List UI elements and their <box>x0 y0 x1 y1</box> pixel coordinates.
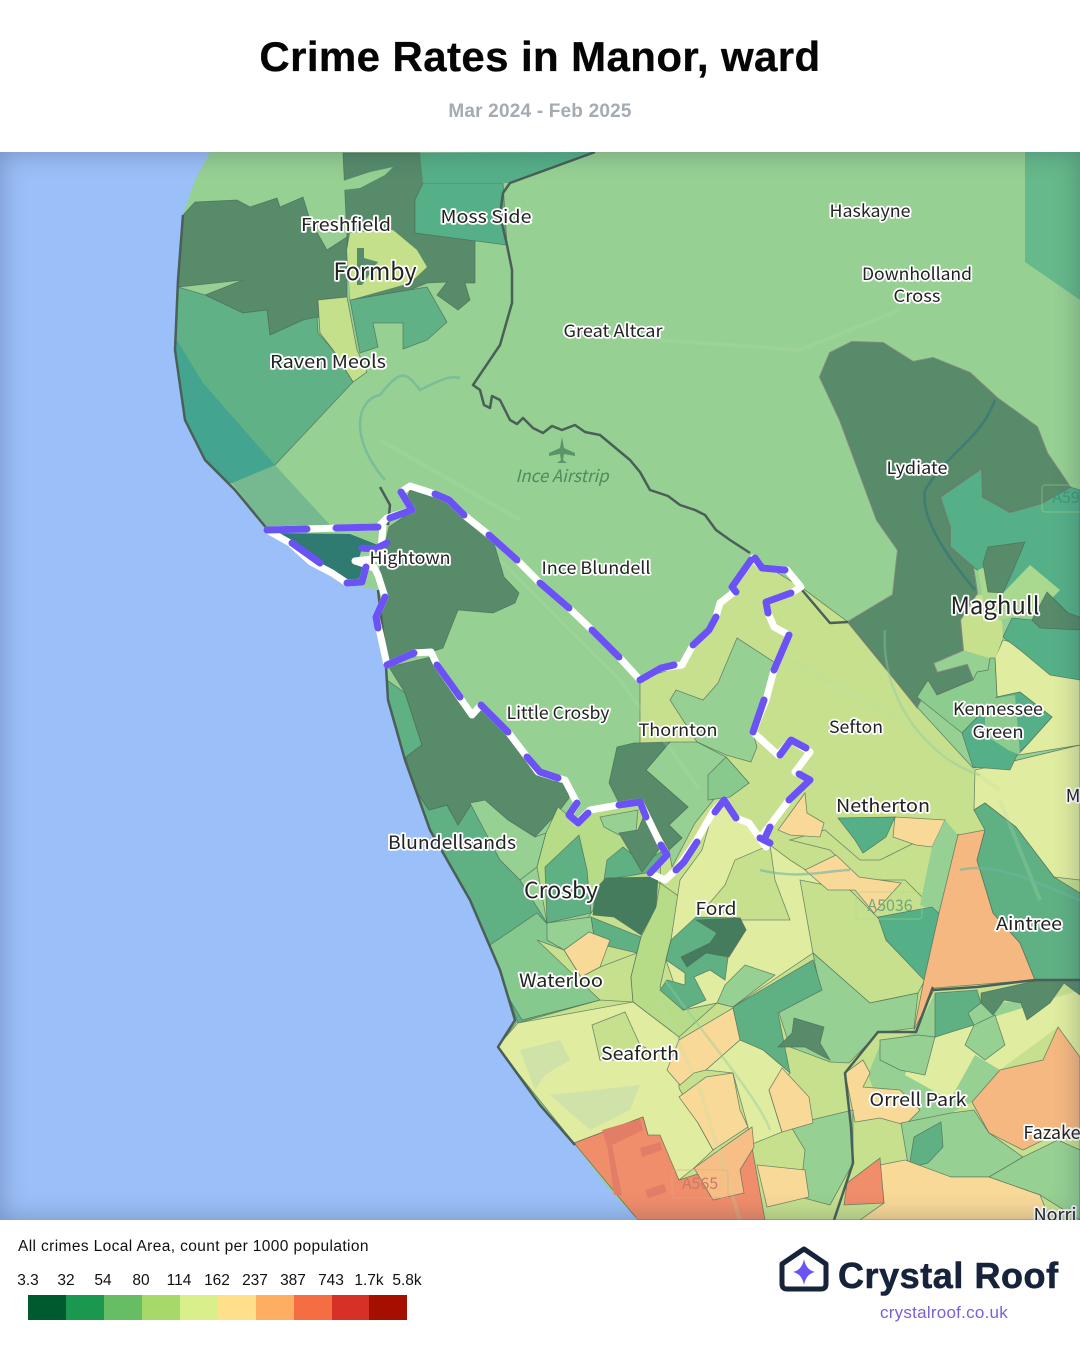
place labels: Orrell Park <box>870 1086 967 1112</box>
place labels: Little Crosby <box>506 699 610 724</box>
logo: Crystal Roof <box>780 1246 1059 1322</box>
place labels: Downholland <box>862 260 972 285</box>
place labels: Seaforth <box>601 1040 679 1066</box>
legend: colour scale: 5.8k <box>392 1272 422 1289</box>
legend: colour scale <box>17 1272 422 1320</box>
icon: airplane <box>549 437 575 463</box>
title: Crime Rates in Manor, ward <box>259 33 821 80</box>
place labels: Blundellsands <box>388 829 516 855</box>
map edge shading <box>0 152 1080 1220</box>
legend: colour scale: 80 <box>132 1272 150 1289</box>
legend: colour scale: 3.3 <box>17 1272 39 1289</box>
legend: colour scale: 387 <box>280 1272 306 1289</box>
place labels: Hightown <box>370 544 450 569</box>
legend: colour scale: 1.7k <box>354 1272 384 1289</box>
place labels: Ince Airstrip <box>516 462 610 487</box>
legend: colour scale: 32 <box>57 1272 75 1289</box>
place labels: Lydiate <box>886 454 948 479</box>
ward boundary: Manor <box>267 486 810 880</box>
place labels: Ford <box>696 895 736 921</box>
icon: house with star <box>780 1246 828 1292</box>
road labels: A5036 <box>867 892 913 916</box>
choropleth map <box>0 152 1080 1220</box>
place labels: Fazake <box>1023 1119 1080 1145</box>
place labels: Formby <box>334 252 417 287</box>
legend: colour scale: 54 <box>94 1272 112 1289</box>
place labels: Netherton <box>836 792 930 818</box>
place labels: Haskayne <box>830 197 910 222</box>
place labels: Ince Blundell <box>542 554 651 579</box>
place labels <box>270 197 1080 1227</box>
subtitle: date range: Mar 2024 - Feb 2025 <box>448 101 632 122</box>
legend: colour scale: 162 <box>204 1272 230 1289</box>
place labels: Norri <box>1034 1201 1076 1227</box>
website url: crystalroof.co.uk <box>880 1303 1008 1322</box>
legend: colour scale: 237 <box>242 1272 268 1289</box>
place labels: Aintree <box>996 910 1062 936</box>
road labels <box>672 484 1080 1198</box>
place labels: Freshfield <box>301 211 391 237</box>
road labels: A565 <box>682 1170 718 1194</box>
rivers <box>360 376 1080 1130</box>
wordmark: Crystal Roof <box>838 1255 1059 1296</box>
place labels: Cross <box>894 282 941 307</box>
legend: colour scale: 114 <box>167 1272 191 1289</box>
place labels: Kennessee <box>953 695 1043 720</box>
place labels: Waterloo <box>519 967 603 993</box>
legend: colour scale: 743 <box>318 1272 344 1289</box>
place labels: Sefton <box>829 713 883 738</box>
place labels: Crosby <box>524 873 599 905</box>
boundary lines <box>175 152 1080 1220</box>
road labels: A59 <box>1052 484 1080 508</box>
place labels: Green <box>972 718 1024 743</box>
place labels: Raven Meols <box>270 348 386 374</box>
place labels: Moss Side <box>440 203 532 229</box>
place labels: Maghull <box>950 586 1040 621</box>
legend title: All crimes Local Area, count per 1000 population <box>18 1238 369 1255</box>
place labels: Great Altcar <box>564 317 663 342</box>
place labels: Thornton <box>638 716 718 741</box>
place labels: M <box>1066 782 1080 808</box>
roads <box>498 560 1042 1220</box>
